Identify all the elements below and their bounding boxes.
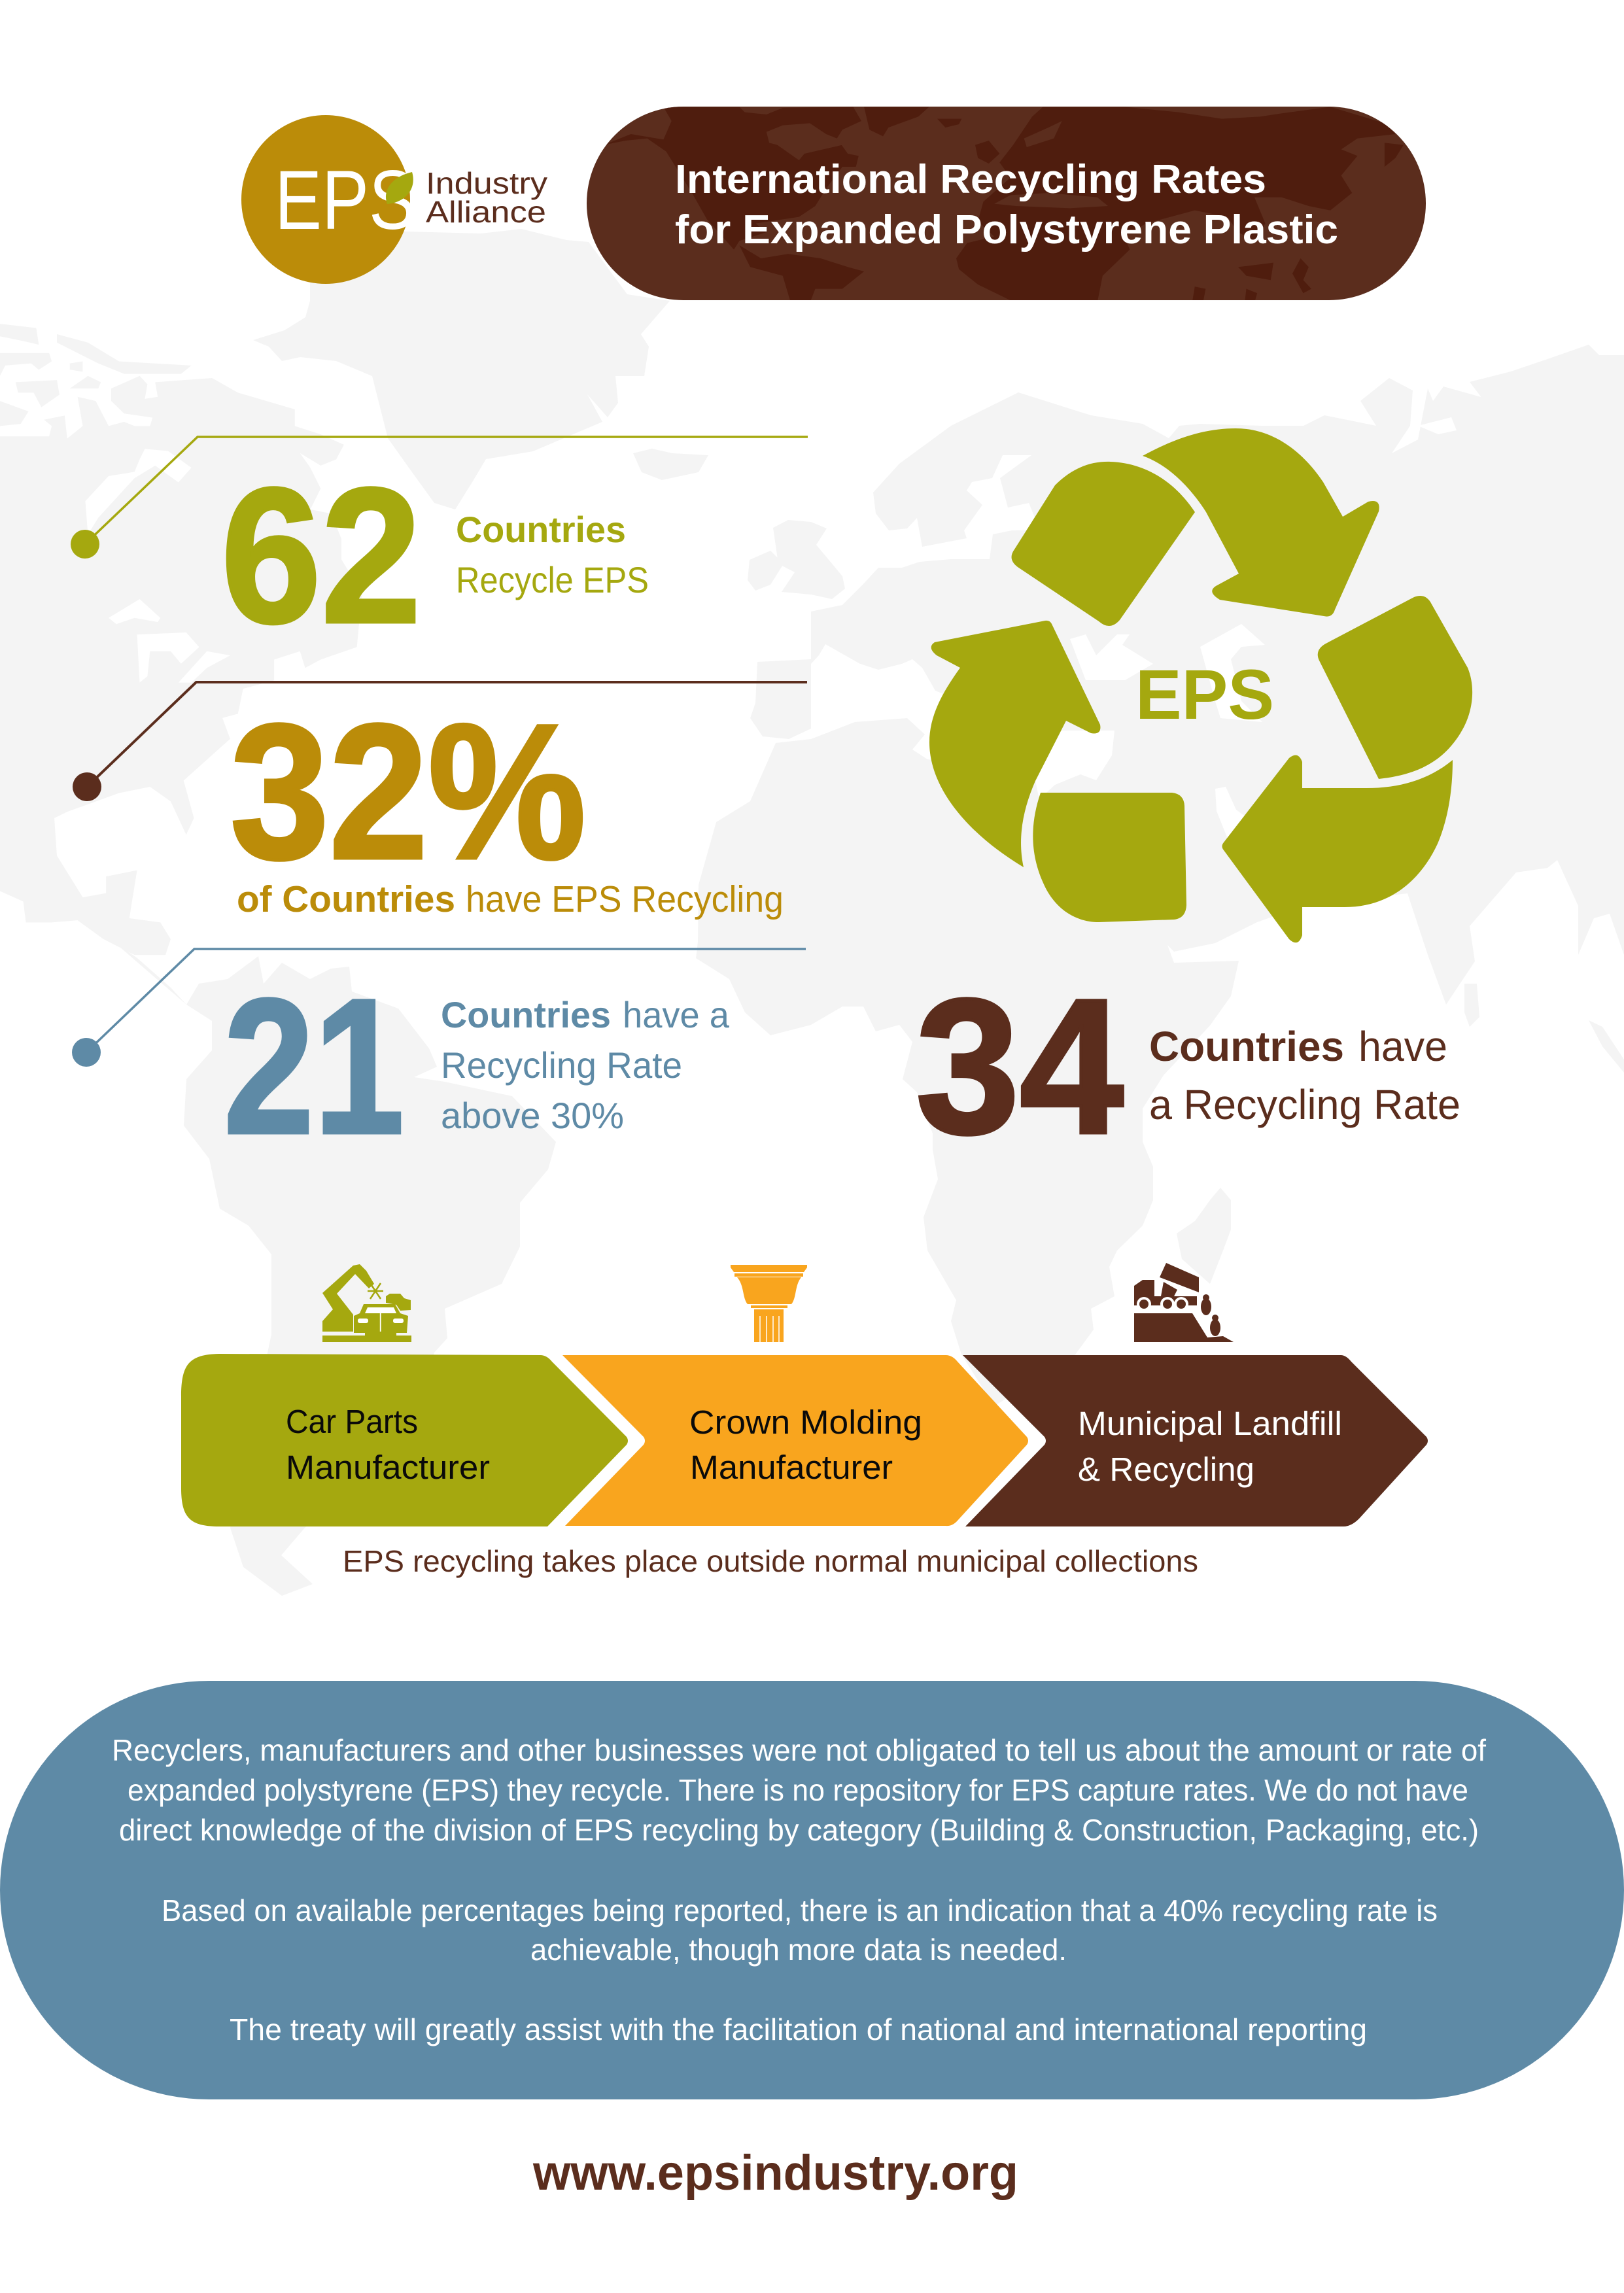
stat label: Countries	[456, 509, 626, 550]
stat label	[456, 509, 649, 600]
connector dot	[71, 530, 99, 559]
stat label: Countries	[441, 994, 611, 1035]
stat label: have	[1358, 1023, 1447, 1070]
paragraph: achievable rate	[162, 1893, 1438, 1967]
title text: for Expanded Polystyrene Plastic	[675, 207, 1338, 252]
caption under arrows: EPS recycling takes place outside normal municipal collections	[343, 1544, 1198, 1578]
title text	[675, 157, 1338, 252]
icon: dump truck at landfill	[1134, 1263, 1234, 1342]
arrow label: Manufacturer	[286, 1449, 490, 1486]
connector line	[87, 682, 807, 787]
arrow label: Manufacturer	[690, 1449, 893, 1486]
background world map	[0, 229, 1624, 1596]
arrow label: Car Parts	[286, 1403, 418, 1440]
logo disc	[241, 115, 410, 284]
icon: robot arm and car	[322, 1264, 411, 1342]
paragraph: data limits: expanded polystyrene (EPS) they recycle. There is no repository for EPS capture rates. We do not have	[128, 1773, 1468, 1807]
stat label: Recycling Rate	[441, 1044, 682, 1086]
stat label: a Recycling Rate	[1149, 1081, 1460, 1128]
big number: 34	[916, 959, 1125, 1174]
website address: www.epsindustry.org	[532, 2145, 1018, 2201]
big number: 62	[221, 449, 421, 663]
stat label: Recycle EPS	[456, 559, 649, 600]
stat label: have a	[623, 994, 730, 1035]
paragraph: achievable rate: achievable, though more data is needed.	[530, 1933, 1067, 1967]
connector line	[85, 437, 808, 544]
stat label	[441, 994, 730, 1136]
paragraph: data limits: direct knowledge of the division of EPS recycling by category (Building & Construction, Packaging, etc.)	[119, 1813, 1479, 1847]
connector dot	[73, 772, 101, 801]
paragraph: data limits	[112, 1733, 1486, 1847]
stat: 62 countries	[71, 437, 808, 663]
logo: EPS Industry Alliance	[241, 115, 547, 284]
arrow label	[1078, 1405, 1342, 1488]
logo leaf	[386, 172, 413, 204]
logo wordmark: Industry	[426, 166, 547, 200]
big number: 32%	[230, 685, 586, 899]
stat label: above 30%	[441, 1095, 624, 1136]
recycling symbol	[929, 428, 1472, 942]
information panel	[0, 1681, 1624, 2099]
title text: International Recycling Rates	[675, 157, 1266, 202]
inland water on the map	[85, 417, 1457, 844]
stat label: Countries	[1149, 1023, 1344, 1070]
connector line	[86, 949, 806, 1052]
connector dot	[72, 1038, 101, 1067]
logo letters EPS: EPS	[275, 154, 416, 247]
logo wordmark	[426, 166, 547, 229]
stat label	[1149, 1023, 1460, 1128]
icon: classical column	[731, 1265, 807, 1342]
stat: 32 percent	[73, 682, 807, 920]
paragraph: achievable rate: Based on available percentages being reported, there is an indication that a 40% recycling rate is	[162, 1893, 1438, 1927]
arrow label	[286, 1403, 490, 1486]
paragraph: treaty: The treaty will greatly assist with the facilitation of national and international reporting	[230, 2012, 1367, 2046]
logo wordmark: Alliance	[426, 195, 546, 229]
banner world map texture	[604, 107, 1404, 303]
arrow label: & Recycling	[1078, 1451, 1254, 1488]
arrow label: Municipal Landfill	[1078, 1405, 1342, 1442]
stat: 34 countries	[916, 959, 1460, 1174]
process arrow: municipal landfill and recycling	[963, 1355, 1428, 1526]
stat label: of Countries	[237, 878, 455, 920]
big number: 21	[224, 959, 404, 1174]
process arrow: crown molding manufacturer	[562, 1355, 1028, 1526]
stat label: have EPS Recycling	[466, 878, 784, 920]
process arrow: car parts manufacturer	[181, 1354, 628, 1526]
stat label	[237, 878, 784, 920]
title banner	[587, 107, 1426, 303]
arrow label	[689, 1404, 922, 1486]
stat: 21 countries	[72, 949, 806, 1174]
recycling symbol centre label: EPS	[1135, 655, 1274, 734]
paragraph: data limits: Recyclers, manufacturers and other businesses were not obligated to tell us about the amount or rate of	[112, 1733, 1486, 1767]
arrow label: Crown Molding	[689, 1404, 922, 1441]
